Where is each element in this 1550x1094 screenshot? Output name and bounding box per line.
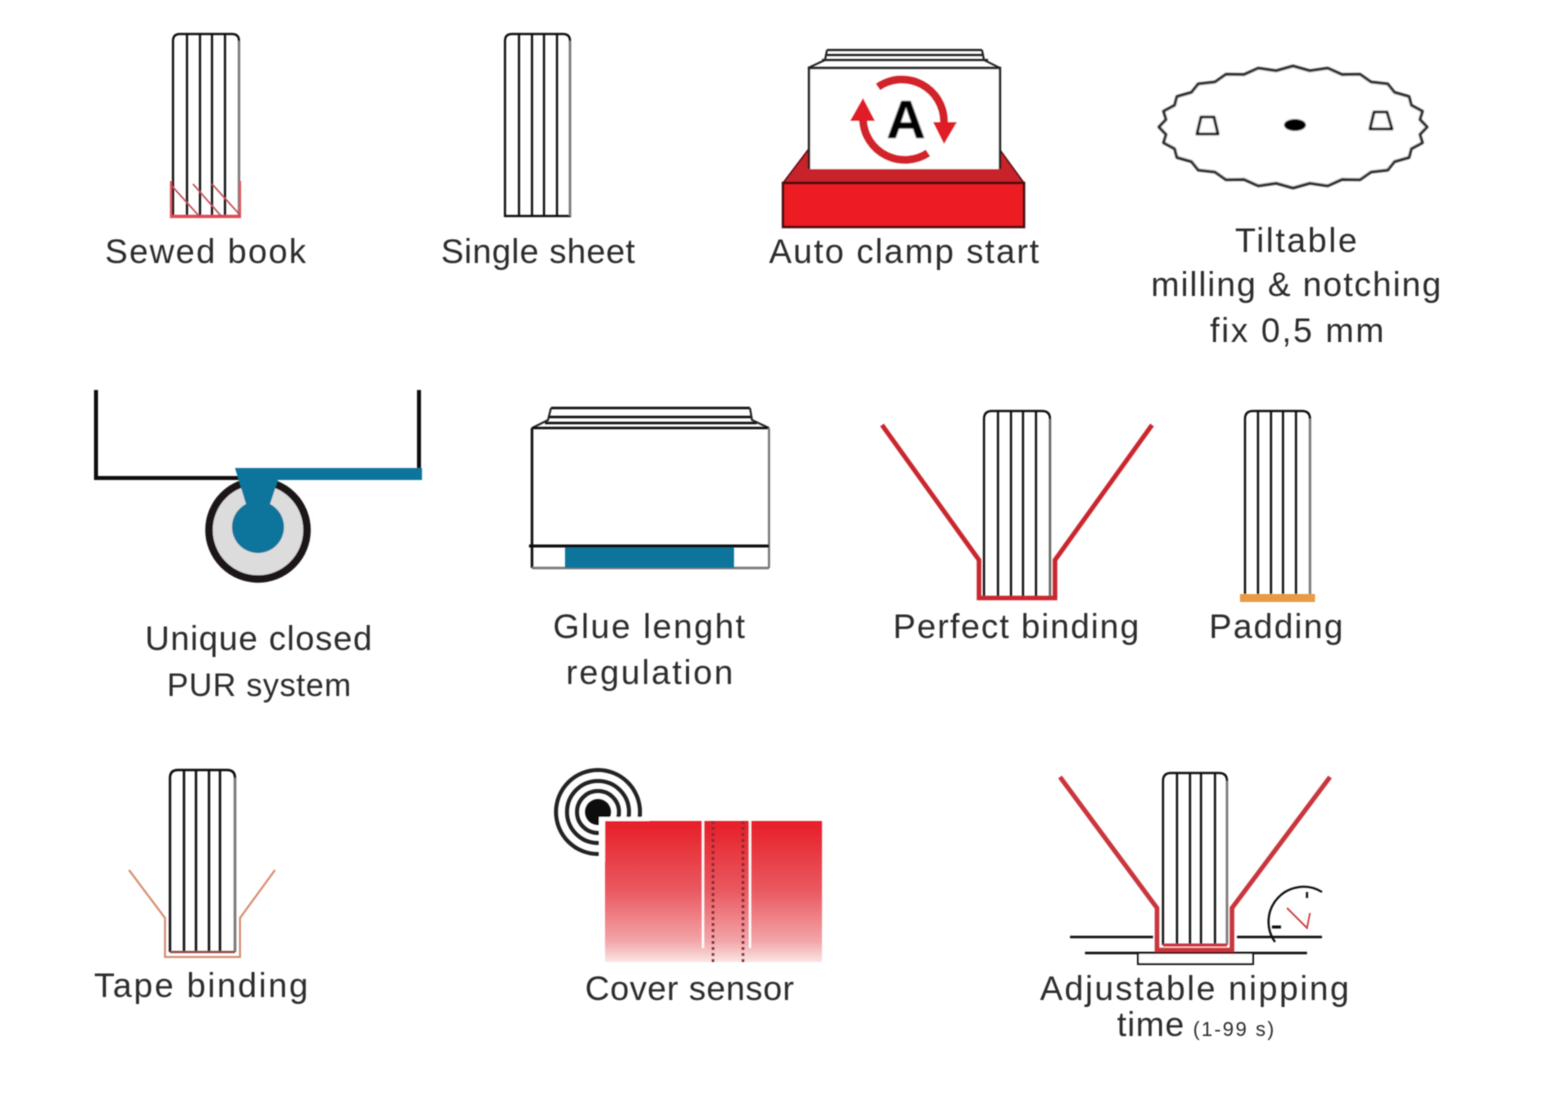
panel: adjustable nipping time (1040, 773, 1349, 1044)
panel: tiltable milling and notching (1151, 66, 1441, 350)
label: tiltable milling and notching: fix 0,5 mm (1210, 312, 1384, 350)
icon: single sheet book (505, 34, 570, 216)
icon: saw blade (1159, 66, 1427, 188)
icon: nipping clamp and gauge (1060, 773, 1330, 964)
panel: auto clamp start (769, 50, 1040, 271)
label: tape binding: Tape binding (94, 967, 308, 1005)
icon: perfect binding (882, 411, 1152, 598)
panel: closed PUR system (96, 390, 422, 703)
icon: auto clamp (783, 50, 1024, 227)
icon: PUR tank and roller (96, 390, 422, 579)
label: adjustable nipping time: (1-99 s) (1193, 1019, 1274, 1041)
label: tiltable milling and notching: milling & notching (1151, 266, 1441, 304)
label: sewed book: Sewed book (105, 233, 307, 271)
label: adjustable nipping time: time (1117, 1006, 1184, 1044)
label: glue length regulation: Glue lenght (553, 608, 746, 646)
label: adjustable nipping time: Adjustable nipping (1040, 970, 1349, 1008)
label: auto clamp start: Auto clamp start (769, 233, 1040, 271)
panel: glue length regulation (529, 408, 769, 692)
label: cover sensor: Cover sensor (585, 970, 794, 1008)
label: single sheet: Single sheet (441, 233, 636, 271)
label: unique closed PUR system: Unique closed (145, 620, 372, 658)
label: tiltable milling and notching (1151, 222, 1441, 350)
label: padding: Padding (1209, 608, 1343, 646)
panel: cover sensor (556, 770, 822, 1008)
panel: padding (1209, 411, 1343, 646)
icon: tape binding (129, 770, 275, 957)
icon: cover sensor (556, 770, 822, 962)
label: unique closed PUR system: PUR system (167, 667, 351, 703)
icon: auto clamp: A (886, 90, 926, 150)
label: unique closed PUR system (145, 620, 372, 703)
label: glue length regulation: regulation (566, 654, 733, 692)
icon: padding block (1240, 411, 1315, 602)
label: perfect binding: Perfect binding (893, 608, 1139, 646)
label: adjustable nipping time (1040, 970, 1349, 1044)
panel: single sheet (441, 34, 636, 271)
panel: sewed book (105, 34, 307, 271)
panel: tape binding (94, 770, 308, 1005)
icon: glue length block (529, 408, 769, 568)
label: glue length regulation (553, 608, 746, 692)
icon: sewed book (171, 34, 240, 217)
label: tiltable milling and notching: Tiltable (1235, 222, 1357, 260)
panel: perfect binding (882, 411, 1152, 646)
